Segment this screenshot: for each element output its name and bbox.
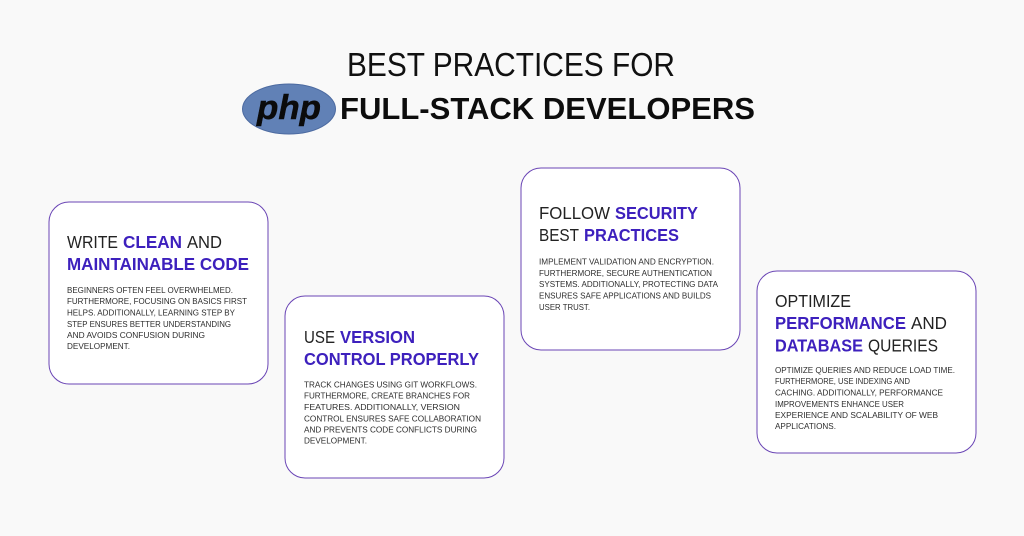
card heading: clean code: MAINTAINABLE CODE [67, 254, 249, 274]
card heading: version control: CONTROL PROPERLY [304, 349, 479, 369]
card body: version control: TRACK CHANGES USING GIT WORKFLOWS. [304, 380, 477, 390]
card body: clean code: BEGINNERS OFTEN FEEL OVERWHELMED. [67, 285, 233, 295]
card heading: clean code: AND [187, 232, 222, 252]
card heading: version control: USE [304, 327, 335, 347]
title: FULL-STACK DEVELOPERS [340, 91, 755, 126]
title: BEST PRACTICES FOR [347, 46, 675, 83]
card body: performance: IMPROVEMENTS ENHANCE USER [775, 399, 904, 409]
card body: version control: FEATURES. ADDITIONALLY, VERSION [304, 402, 460, 412]
card body: performance: FURTHERMORE, USE INDEXING AND [775, 376, 910, 386]
card heading: security: FOLLOW [539, 203, 610, 223]
card body: clean code: HELPS. ADDITIONALLY, LEARNING STEP BY [67, 308, 235, 318]
icon: php logo: php [256, 89, 321, 127]
card body: clean code [67, 285, 248, 351]
card heading: performance: AND [911, 313, 947, 333]
card body: security: SYSTEMS. ADDITIONALLY, PROTECTING DATA [539, 279, 718, 289]
card body: clean code: STEP ENSURES BETTER UNDERSTANDING [67, 319, 231, 329]
panel: security [521, 168, 740, 350]
card body: security: USER TRUST. [539, 302, 590, 312]
card body: security: IMPLEMENT VALIDATION AND ENCRYPTION. [539, 256, 714, 266]
card body: version control: DEVELOPMENT. [304, 436, 367, 446]
card body: performance [775, 365, 955, 431]
card body: security: ENSURES SAFE APPLICATIONS AND BUILDS [539, 290, 711, 300]
panel: version control [285, 296, 504, 478]
card heading: clean code: CLEAN [123, 232, 182, 252]
card body: version control: CONTROL ENSURES SAFE COLLABORATION [304, 414, 481, 424]
card body: version control [304, 380, 481, 446]
card body: security: FURTHERMORE, SECURE AUTHENTICATION [539, 268, 712, 278]
panel: performance [757, 271, 976, 453]
card body: clean code: FURTHERMORE, FOCUSING ON BASICS FIRST [67, 296, 248, 306]
card heading: version control: VERSION [340, 327, 415, 347]
card heading: security: BEST [539, 225, 579, 245]
card heading: security: PRACTICES [584, 225, 679, 245]
card heading: clean code [67, 232, 249, 274]
card heading: performance: PERFORMANCE [775, 313, 906, 333]
card body: performance: APPLICATIONS. [775, 421, 836, 431]
card body: version control: FURTHERMORE, CREATE BRANCHES FOR [304, 390, 470, 400]
card heading: security: SECURITY [615, 203, 698, 223]
card body: performance: OPTIMIZE QUERIES AND REDUCE LOAD TIME. [775, 365, 955, 375]
card body: performance: EXPERIENCE AND SCALABILITY OF WEB [775, 410, 938, 420]
title [340, 46, 755, 126]
card body: version control: AND PREVENTS CODE CONFLICTS DURING [304, 424, 477, 434]
card heading: security [539, 203, 698, 245]
card body: performance: CACHING. ADDITIONALLY, PERFORMANCE [775, 388, 943, 398]
card body: clean code: AND AVOIDS CONFUSION DURING [67, 330, 205, 340]
card heading: clean code: WRITE [67, 232, 118, 252]
card body: clean code: DEVELOPMENT. [67, 341, 130, 351]
card heading: performance: DATABASE [775, 336, 863, 356]
card heading: performance [775, 291, 947, 356]
card body: security [539, 256, 718, 312]
card heading: performance: OPTIMIZE [775, 291, 851, 311]
card heading: performance: QUERIES [868, 336, 938, 356]
card heading: version control [304, 327, 479, 369]
icon: php logo [242, 84, 336, 134]
panel: clean code [49, 202, 268, 384]
